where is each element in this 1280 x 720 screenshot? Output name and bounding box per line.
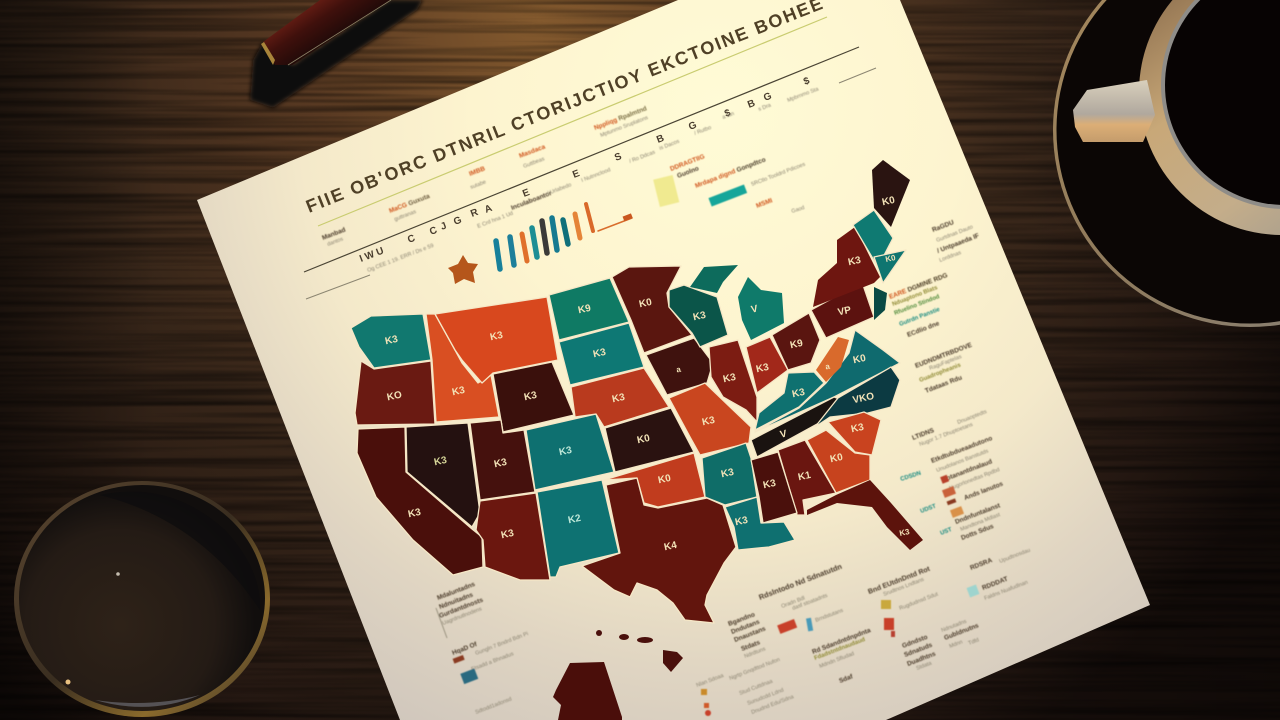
secondary rules: [306, 68, 876, 299]
state: North Carolina: [815, 367, 900, 427]
right column notes: LTIDNS: [911, 427, 936, 442]
bottom notes: Ndrdtuns: [744, 646, 767, 660]
state: South Carolina: [828, 412, 881, 455]
map state labels: K1: [797, 470, 812, 483]
bottom notes: Srudtnos Lndtans: [883, 577, 925, 598]
right column notes: Dotts Sdus: [960, 523, 995, 542]
bottom notes: Rugdudnsd Sdut: [899, 591, 939, 612]
state: Nebraska: [571, 368, 669, 427]
right column notes: [888, 219, 1005, 542]
right column notes: Gutrdn Panstie: [899, 307, 941, 328]
right column notes: Dndnfuntalanst: [954, 502, 1002, 526]
map state labels: a: [824, 362, 831, 371]
state: Missouri: [669, 383, 751, 455]
header column labels: Manbad: [321, 227, 347, 242]
header icon row: J: [439, 221, 448, 233]
map state labels: K3: [701, 415, 716, 428]
bottom notes: Duadhtns: [906, 650, 937, 668]
header icon row: E: [571, 168, 582, 181]
state: Washington: [351, 314, 431, 368]
state: New Mexico: [537, 480, 619, 577]
map state labels: K3: [755, 362, 770, 375]
header icon row: $: [723, 107, 733, 120]
red and teal markers: [777, 618, 813, 634]
bottom notes: Sdtodd1adonsd: [475, 696, 513, 716]
state: Kentucky: [755, 372, 824, 430]
state: Virginia: [755, 330, 900, 432]
map state labels: K3: [500, 528, 515, 541]
bottom notes: Sunudcdd Ldnd: [747, 687, 785, 707]
header rule dark: [304, 47, 859, 272]
left legend: HqaD Of: [451, 641, 479, 657]
header legend block: DDRAGTIIG: [669, 153, 706, 173]
state: Pennsylvania: [811, 282, 874, 338]
state: Tennessee: [751, 397, 848, 457]
map state labels: K3: [493, 457, 508, 470]
state: South Dakota: [559, 323, 644, 385]
map state labels: K0: [881, 195, 896, 208]
state: Ohio: [772, 313, 820, 370]
header legend block: Mrdapa dignd Gonpdtco: [694, 156, 767, 190]
right column notes: Nugor 1.7 Dhuptoetans: [919, 422, 974, 448]
coffee cup on saucer: [1053, 0, 1280, 327]
header icon row: G: [762, 91, 774, 104]
header small captions: / Ro Ddcas: [629, 149, 656, 165]
header column labels: guttranas: [394, 209, 417, 223]
right column notes: CDSDN: [900, 471, 922, 483]
left key table: Gurdantdnosts: [438, 597, 485, 620]
map state labels: a: [675, 365, 682, 374]
right column notes: Etkdtubdueaadutono: [930, 435, 993, 465]
header legend block: Gaod: [791, 205, 805, 215]
bottom notes: Mdnn: [949, 639, 964, 650]
bottom notes: Rd Sdandntdnpdnta: [811, 627, 872, 656]
right column notes: EUDNDMTRBDOVE: [914, 341, 974, 370]
state: Utah: [470, 420, 535, 500]
state: Michigan lower: [738, 277, 784, 340]
header small captions: I Nutnnclood: [581, 167, 612, 184]
header legend block: 5RCtlo Tooldrd Pdicoes: [751, 162, 807, 188]
yellow legend swatch: [653, 175, 679, 207]
bottom notes: Sdnatuds: [903, 642, 934, 659]
bottom notes: dasf stoatadnts: [792, 593, 829, 612]
header icon row: E: [521, 187, 532, 200]
header icon row: [358, 75, 812, 265]
map state labels: K3: [558, 445, 573, 458]
map state labels: K3: [611, 392, 626, 405]
header column labels: Guttbeas: [523, 156, 546, 170]
map state labels: K3: [580, 690, 595, 703]
state: Mississippi: [751, 452, 797, 523]
bottom notes: RDSRA: [969, 557, 994, 572]
right column notes: Nduaptono Blats: [892, 285, 939, 308]
header column labels: Nppliqg Rpalmtnd: [593, 105, 648, 132]
header column labels: Masdaca: [518, 143, 547, 160]
bottom notes: Rdslntodo Nd Sdnatutdn: [757, 562, 844, 602]
bottom notes: Brndstutans: [815, 608, 844, 624]
map state labels: K3: [407, 507, 422, 520]
left key table: [436, 581, 485, 638]
state: West Virginia: [816, 337, 849, 382]
header legend block: [653, 153, 807, 215]
right column notes: Unudolanos Banstutds: [936, 448, 990, 474]
header small captions: / Urlabedo: [547, 182, 572, 197]
state: Indiana: [746, 337, 788, 393]
state: Colorado: [526, 414, 614, 490]
state: Iowa: [646, 338, 713, 395]
left key table: Mdaluntadns: [436, 581, 476, 602]
header small captions: Og CEE 1 19. ERR / Ds e 59: [367, 243, 435, 274]
map state labels: K3: [384, 334, 399, 347]
magnifying glass: [14, 481, 270, 717]
state: Maine: [872, 160, 910, 227]
map state labels: K3: [692, 310, 707, 323]
coffee: [1165, 0, 1280, 205]
right column notes: ECdlio dne: [906, 320, 941, 339]
right column notes: Rfuelino Stindod: [894, 294, 941, 317]
state: Florida: [807, 480, 923, 550]
right column notes: Nugorlonedtas Rpdbd: [949, 467, 1001, 492]
header small captions: is Dacos: [659, 139, 681, 152]
bottom notes: Nlan Sdoaa: [696, 673, 725, 689]
map state labels: V: [779, 428, 788, 441]
right column notes: Lorddnas: [939, 250, 962, 264]
state: Minnesota: [612, 266, 692, 353]
bottom notes: Bgandno: [727, 611, 756, 628]
state: New Jersey and Delaware: [874, 287, 887, 320]
header icon row: C: [428, 225, 439, 238]
state: North Dakota: [549, 278, 629, 340]
bottom notes: Faldns Nuafudlnan: [984, 580, 1029, 602]
state: Oregon: [355, 361, 435, 425]
bottom notes: [436, 548, 1031, 716]
map state labels: K3: [899, 527, 911, 538]
header column labels: Mptunmo Sruplatons: [600, 115, 649, 139]
map state labels: K0: [852, 353, 867, 366]
bottom notes: RDDDAT: [981, 576, 1009, 592]
state: Alabama: [778, 440, 836, 515]
right column notes: EARE DGMINE RDG: [888, 272, 949, 301]
left key table: Uagrdnutlnodens: [442, 606, 483, 627]
Alaska: [553, 662, 622, 720]
bottom notes: Stdata: [916, 660, 933, 672]
map state labels: K9: [789, 338, 804, 351]
bottom notes: Dndutans: [730, 618, 761, 636]
map state labels: V: [750, 303, 759, 316]
paper sheet: [197, 0, 1150, 720]
state: New Hampshire and Vermont: [853, 210, 893, 267]
header small captions: / Rutbo: [694, 125, 712, 137]
map state labels: K3: [451, 385, 466, 398]
map state labels: K3: [523, 390, 538, 403]
map state labels: [384, 195, 911, 703]
right column notes: Dnuaoptedts: [957, 409, 988, 426]
bottom notes: Oradn Bdl: [781, 595, 806, 610]
bottom notes: Upudtnosdau: [999, 548, 1031, 565]
header icon row: $: [802, 75, 812, 88]
title and header: [303, 0, 876, 299]
header icon row: G: [452, 215, 464, 228]
map state labels: K9: [577, 303, 592, 316]
map state labels: K3: [847, 255, 862, 268]
header icon row: B: [655, 133, 666, 146]
map state labels: K0: [829, 452, 844, 465]
state: Wyoming: [493, 362, 574, 432]
map state labels: K3: [722, 372, 737, 385]
left legend: Etsadd a Bhnadus: [471, 651, 515, 673]
title rule olive: [318, 17, 827, 226]
state: Kansas: [605, 408, 694, 472]
right column notes: / Untpaaeda IF: [936, 232, 980, 255]
state: Wisconsin: [669, 285, 728, 347]
header small captions: E Crd hna 1 Ud: [477, 211, 514, 230]
bottom notes: Ndnutadns: [941, 619, 968, 634]
right column notes: RaGDU: [931, 219, 955, 234]
header column labels: dantos: [327, 236, 344, 248]
map state labels: K4: [663, 540, 678, 553]
state: Louisiana: [725, 497, 795, 550]
state: Massachusetts and Connecticut: [874, 250, 906, 283]
right column notes: UST: [940, 527, 953, 537]
header icon row: S: [613, 151, 624, 164]
bottom notes: Dnudnd Edu/Sdna: [751, 694, 796, 716]
header column labels: IMBB: [468, 165, 487, 178]
map state labels: K3: [734, 515, 749, 528]
right column notes: Tdataas Rdu: [924, 374, 963, 395]
bottom notes: Ngrtp Gnqdttod Nufon: [729, 657, 781, 682]
cup body: [1139, 0, 1280, 235]
header icon row: B: [746, 98, 757, 111]
right column notes: Ands lanutos: [963, 480, 1005, 502]
map state labels: K0: [636, 433, 651, 446]
header small captions: Inculaboantor: [510, 190, 553, 212]
map state labels: K3: [720, 467, 735, 480]
map state labels: K3: [592, 347, 607, 360]
bottom notes: Gubldnutns: [943, 622, 980, 642]
Hawaii islands: [596, 630, 683, 672]
header icon row: A: [483, 203, 494, 216]
state: Arizona: [476, 493, 550, 580]
header small captions: s Dra: [758, 102, 773, 113]
state: Montana: [435, 297, 558, 383]
bottom notes: Bnd EUtdnDntd Rot: [867, 566, 932, 596]
bottom notes: Stud Cuttdnaa: [739, 678, 774, 697]
map state labels: VKO: [852, 391, 875, 406]
map state labels: K3: [762, 478, 777, 491]
header icon row: I W U: [358, 246, 385, 265]
map state labels: K0: [638, 297, 653, 310]
right column notes: Guadropheanis: [919, 362, 962, 384]
bottom notes: Tdfd: [968, 637, 980, 647]
bottom notes: Gdndsto: [901, 634, 929, 650]
left legend: Gungln 7 Bndrd Bdn Pi: [475, 631, 529, 657]
right column notes: Dotanantdnalaud: [941, 458, 993, 484]
bottom notes: Fdadstntdnaudaud: [814, 637, 866, 662]
state: California: [357, 427, 483, 575]
teal legend chip: [708, 185, 747, 207]
cup rim: [1161, 0, 1280, 209]
state: Georgia: [807, 430, 870, 493]
pen on desk: [250, 0, 423, 108]
map state labels: K2: [567, 513, 582, 526]
bottom notes: Mdndn Sfludad: [819, 651, 855, 670]
header column labels: sutabe: [470, 179, 487, 191]
header small captions: a Ian: [722, 111, 735, 121]
right column notes: UDST: [920, 504, 937, 515]
map state labels: K0: [885, 253, 897, 264]
header legend block: Guolno: [676, 165, 700, 180]
left key table: Ndnuitadns: [438, 591, 474, 611]
header column labels: [321, 105, 649, 248]
bottom notes: Dnaustans: [733, 625, 767, 644]
cup handle: [1073, 80, 1155, 142]
map state labels: VP: [837, 305, 852, 318]
map state labels: KO: [386, 390, 403, 403]
map state labels: K3: [433, 455, 448, 468]
star icon: [448, 255, 478, 284]
header column labels: MaCG Guxuta: [388, 193, 431, 215]
state: Nevada: [406, 423, 480, 527]
state: Arkansas: [702, 443, 757, 505]
header icon row: G: [687, 120, 699, 133]
state: New York: [813, 227, 880, 307]
header small captions: [367, 86, 820, 274]
orange swatches: [940, 475, 964, 518]
right column notes: Gurtdnas Dauto: [936, 224, 974, 244]
state: Texas: [582, 478, 736, 623]
state: Illinois: [709, 340, 757, 422]
saucer: [1053, 0, 1280, 327]
left legend: [451, 631, 529, 684]
map state labels: K3: [850, 422, 865, 435]
state: Oklahoma: [604, 453, 705, 507]
right column notes: RaguFaptelas: [929, 354, 963, 372]
map state labels: K3: [791, 387, 806, 400]
bottom notes: Sdaf: [838, 673, 855, 685]
header icon row: C: [406, 233, 417, 246]
US map: [351, 160, 923, 623]
header legend block: MSMI: [755, 197, 774, 210]
right column notes: Mandtona Mdlast: [960, 512, 1002, 533]
map state labels: K3: [489, 330, 504, 343]
state: Michigan upper: [690, 265, 738, 293]
header icon row: R: [469, 207, 481, 220]
header small captions: Mpbrnmo Sta: [787, 86, 820, 104]
map state labels: K0: [657, 473, 672, 486]
bar chart: [496, 204, 633, 269]
bottom notes: Stdats: [740, 639, 762, 653]
state: Idaho: [426, 314, 499, 422]
